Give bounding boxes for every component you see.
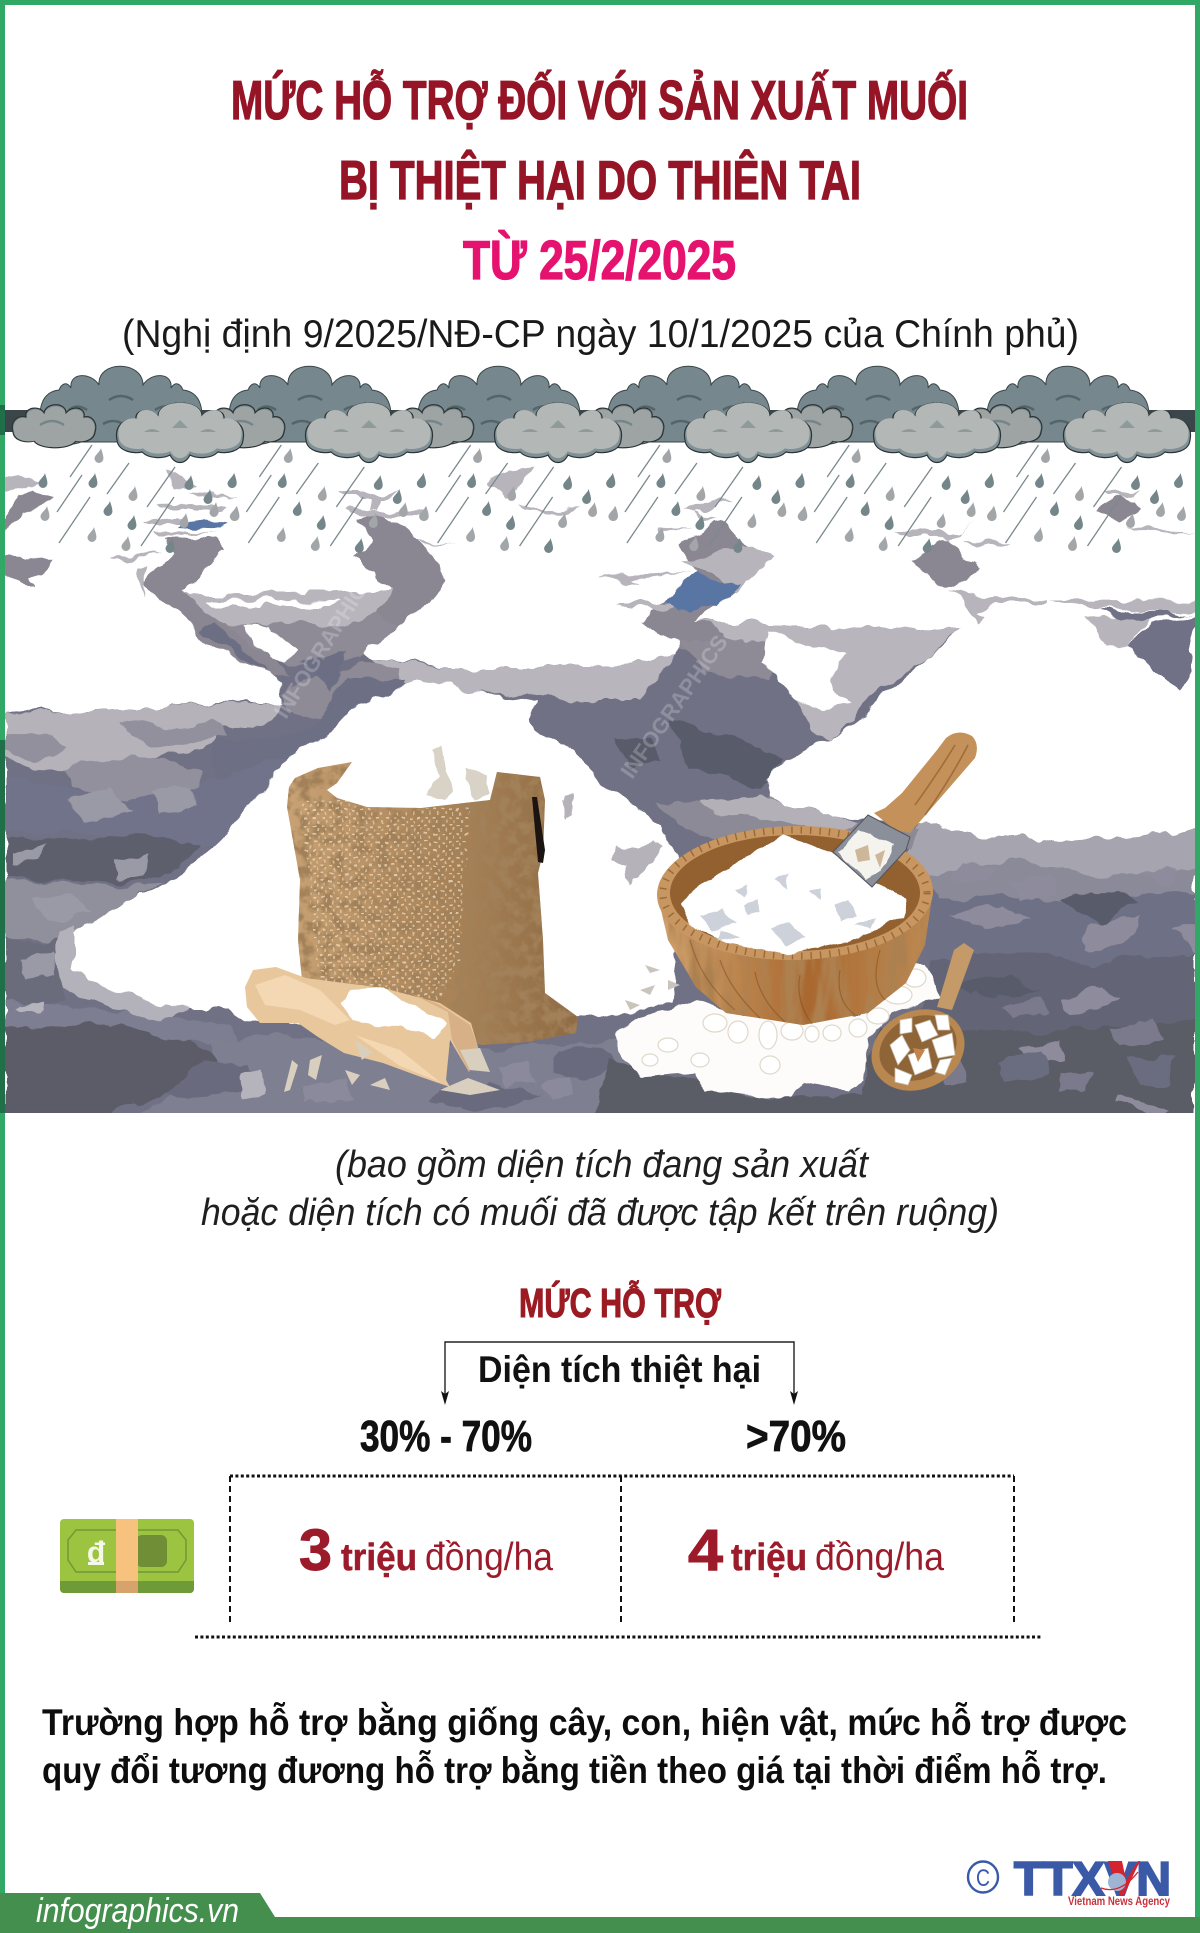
note line one: Trường hợp hỗ trợ bằng giống cây, con, hiện vật, mức hỗ trợ được [42, 1701, 1127, 1743]
icon: money bundle: đ [87, 1536, 106, 1569]
icon: money bundle [60, 1519, 194, 1593]
label: 30% - 70%: 30% - 70% [360, 1412, 532, 1461]
watermark: INFOGRAPHICS [269, 566, 380, 723]
text block: in-kind support note [42, 1701, 1127, 1791]
label: over 70%: >70% [746, 1412, 846, 1461]
storm clouds [5, 366, 1195, 462]
frame: darker border over scene [0, 405, 5, 1113]
watermark [274, 592, 726, 779]
label: damaged area: Diện tích thiệt hại [478, 1349, 761, 1390]
note line 1: (bao gồm diện tích đang sản xuất [335, 1144, 869, 1186]
site name: infographics.vn [36, 1892, 239, 1930]
white main mound [73, 680, 690, 1030]
panel: salt field scene [0, 467, 1200, 1130]
heading: support level: MỨC HỖ TRỢ [519, 1280, 721, 1326]
value: 4 million per hectare: 4 [688, 1518, 723, 1583]
watermark: INFOGRAPHICS [616, 630, 733, 783]
rain [38, 445, 1186, 553]
icon: salt chips pile [615, 963, 941, 1098]
title [231, 69, 968, 291]
logo: TTXVN: C [976, 1865, 990, 1892]
value: 3 million per hectare: triệu [341, 1537, 417, 1579]
value: 4 million per hectare: triệu [731, 1537, 807, 1579]
note line two: quy đổi tương đương hỗ trợ bằng tiền theo giá tại thời điểm hỗ trợ. [42, 1749, 1107, 1791]
icon: wooden salt scoop [245, 967, 500, 1095]
icon: scoop in bowl [833, 732, 977, 887]
footer bar with site tab [0, 1892, 1200, 1933]
logo: TTXVN: TTXVN [1014, 1852, 1171, 1905]
central white patch [761, 633, 853, 710]
upper gray road patches [5, 467, 1200, 687]
value: 3 million per hectare: đồng/ha [425, 1536, 553, 1579]
value: 4 million per hectare: đồng/ha [815, 1536, 944, 1579]
ground with patches [0, 500, 1200, 1130]
note line 2: hoặc diện tích có muối đã được tập kết trên ruộng) [201, 1192, 999, 1234]
icon: wooden bowl with salt [656, 824, 934, 1025]
logo: TTXVN: Vietnam News Agency [1068, 1894, 1170, 1908]
icon: burlap sack of salt [287, 745, 578, 1045]
italic note [201, 1144, 999, 1234]
value: 3 million per hectare: 3 [299, 1518, 332, 1583]
gray streak on main mound [563, 790, 665, 885]
title date: TỪ 25/2/2025 [463, 229, 736, 291]
value: 3 million per hectare [299, 1518, 553, 1583]
painted terrain [0, 467, 1200, 1130]
subtitle: (Nghị định 9/2025/NĐ-CP ngày 10/1/2025 của Chính phủ) [122, 313, 1079, 356]
arrows: damaged area bracket [441, 1342, 798, 1405]
value: 4 million per hectare [688, 1518, 944, 1583]
icon: small wooden spoon [858, 943, 978, 1106]
title line 2: BỊ THIỆT HẠI DO THIÊN TAI [339, 149, 861, 211]
table: dotted support table [195, 1476, 1041, 1637]
